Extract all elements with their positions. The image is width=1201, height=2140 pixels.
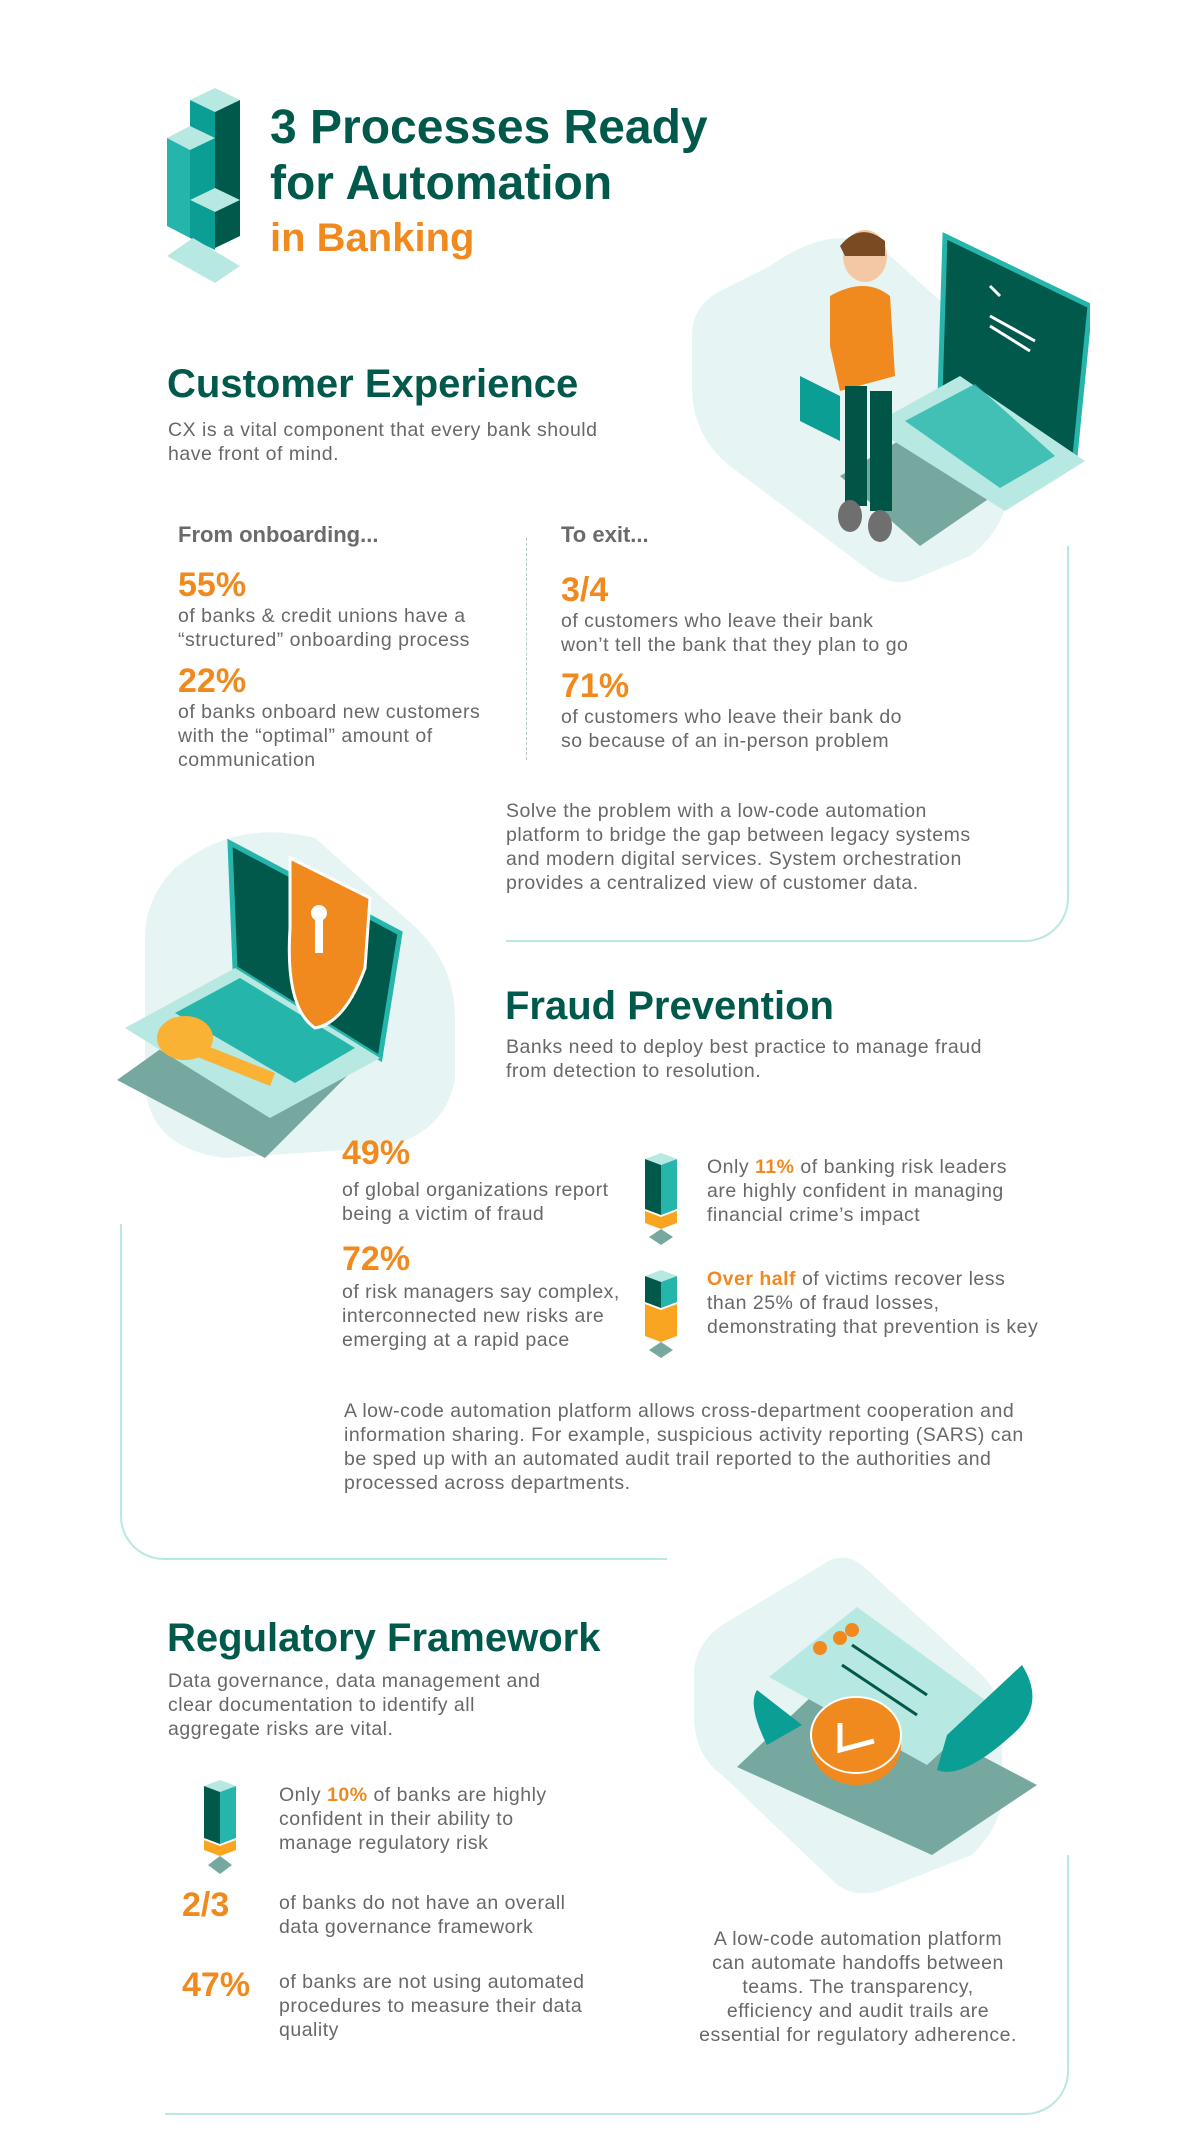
text: over half: Over half of victims recover less: [707, 1268, 1005, 1290]
column: exit: won’t tell the bank that they plan to go: [561, 634, 908, 656]
panel border CX: [506, 546, 1069, 942]
column: onboarding: From onboarding...: [178, 522, 378, 547]
column: onboarding: with the “optimal” amount of: [178, 725, 433, 747]
fraud description: [506, 1036, 982, 1082]
text: 11%: are highly confident in managing: [707, 1180, 1004, 1202]
title: for Automation: [270, 157, 612, 210]
text: data governance framework: [279, 1916, 533, 1938]
column: exit: of customers who leave their bank do: [561, 706, 902, 728]
text: of banks do not have an overall: [279, 1892, 566, 1914]
title: 3 Processes Ready: [270, 101, 708, 154]
icon: bar block 3: [204, 1780, 236, 1874]
stat: 49%: 49%: [342, 1134, 410, 1172]
column: exit: of customers who leave their bank: [561, 610, 873, 632]
illustration: person with laptop: [692, 230, 1090, 582]
CX solution text: and modern digital services. System orchestration: [506, 848, 962, 870]
column: exit: [561, 522, 908, 752]
CX solution text: provides a centralized view of customer data.: [506, 872, 919, 894]
fraud solution text: be sped up with an automated audit trail reported to the authorities and: [344, 1448, 991, 1470]
regulatory solution text: A low-code automation platform: [714, 1928, 1002, 1950]
stat: 72%: interconnected new risks are: [342, 1305, 604, 1327]
fraud description: Banks need to deploy best practice to manage fraud: [506, 1036, 982, 1058]
CX solution text: [506, 800, 971, 894]
CX description: CX is a vital component that every bank should: [168, 419, 597, 441]
column: onboarding: of banks & credit unions have a: [178, 605, 466, 627]
column: onboarding: “structured” onboarding process: [178, 629, 470, 651]
section heading: Fraud Prevention: Fraud Prevention: [505, 984, 834, 1028]
section heading: Regulatory Framework: Regulatory Framework: [167, 1616, 600, 1660]
fraud solution text: information sharing. For example, suspicious activity reporting (SARS) can: [344, 1424, 1024, 1446]
illustration: laptop with shield and key: [117, 832, 455, 1158]
stat: 49%: [342, 1134, 608, 1225]
text: 10%: [279, 1784, 547, 1854]
column: exit: 3/4: [561, 571, 608, 609]
column: onboarding: communication: [178, 749, 316, 771]
illustration: document with coin: [694, 1558, 1037, 1894]
panel border fraud: [120, 1224, 667, 1560]
logo icon: stacked blocks: [167, 88, 240, 283]
stat: 2/3: 2/3: [182, 1886, 229, 1924]
text: procedures to measure their data: [279, 1995, 582, 2017]
fraud solution text: A low-code automation platform allows cross-department cooperation and: [344, 1400, 1014, 1422]
regulatory description: Data governance, data management and: [168, 1670, 540, 1692]
stat: 47%: 47%: [182, 1966, 250, 2004]
icon: bar block 2: [645, 1270, 677, 1358]
title: [270, 101, 708, 260]
CX description: have front of mind.: [168, 443, 339, 465]
regulatory solution text: efficiency and audit trails are: [727, 2000, 989, 2022]
text: over half: [707, 1268, 1038, 1338]
stat: 72%: emerging at a rapid pace: [342, 1329, 570, 1351]
stat: 49%: of global organizations report: [342, 1179, 608, 1201]
regulatory solution text: [699, 1928, 1017, 2046]
text: 11%: Only 11% of banking risk leaders: [707, 1156, 1007, 1178]
column: onboarding: [178, 522, 480, 771]
regulatory solution text: teams. The transparency,: [742, 1976, 974, 1998]
section heading: Customer Experience: Customer Experience: [167, 362, 578, 406]
regulatory description: aggregate risks are vital.: [168, 1718, 393, 1740]
text: over half: demonstrating that prevention is key: [707, 1316, 1038, 1338]
column: onboarding: 55%: [178, 566, 246, 604]
regulatory description: clear documentation to identify all: [168, 1694, 475, 1716]
stat: 72%: 72%: [342, 1240, 410, 1278]
fraud description: from detection to resolution.: [506, 1060, 761, 1082]
CX solution text: platform to bridge the gap between legacy systems: [506, 824, 971, 846]
column: exit: 71%: [561, 667, 629, 705]
column: onboarding: of banks onboard new customers: [178, 701, 480, 723]
text: 10%: Only 10% of banks are highly: [279, 1784, 547, 1806]
text: quality: [279, 2019, 339, 2041]
text: 10%: confident in their ability to: [279, 1808, 514, 1830]
CX solution text: Solve the problem with a low-code automation: [506, 800, 927, 822]
stat: 72%: of risk managers say complex,: [342, 1281, 620, 1303]
text: 11%: financial crime’s impact: [707, 1204, 920, 1226]
text: of banks are not using automated: [279, 1971, 584, 1993]
fraud solution text: processed across departments.: [344, 1472, 631, 1494]
fraud solution text: [344, 1400, 1024, 1494]
stat: 72%: [342, 1240, 620, 1351]
regulatory solution text: can automate handoffs between: [712, 1952, 1004, 1974]
stat: 49%: being a victim of fraud: [342, 1203, 544, 1225]
panel border regulatory: [165, 1855, 1069, 2115]
column: onboarding: 22%: [178, 662, 246, 700]
column: exit: so because of an in-person problem: [561, 730, 889, 752]
regulatory solution text: essential for regulatory adherence.: [699, 2024, 1017, 2046]
icon: bar block 1: [645, 1153, 677, 1245]
title: in Banking: [270, 216, 474, 260]
regulatory description: [168, 1670, 540, 1740]
CX description: [168, 419, 597, 465]
text: 11%: [707, 1156, 1007, 1226]
column: exit: To exit...: [561, 522, 649, 547]
text: 10%: manage regulatory risk: [279, 1832, 488, 1854]
text: over half: than 25% of fraud losses,: [707, 1292, 940, 1314]
